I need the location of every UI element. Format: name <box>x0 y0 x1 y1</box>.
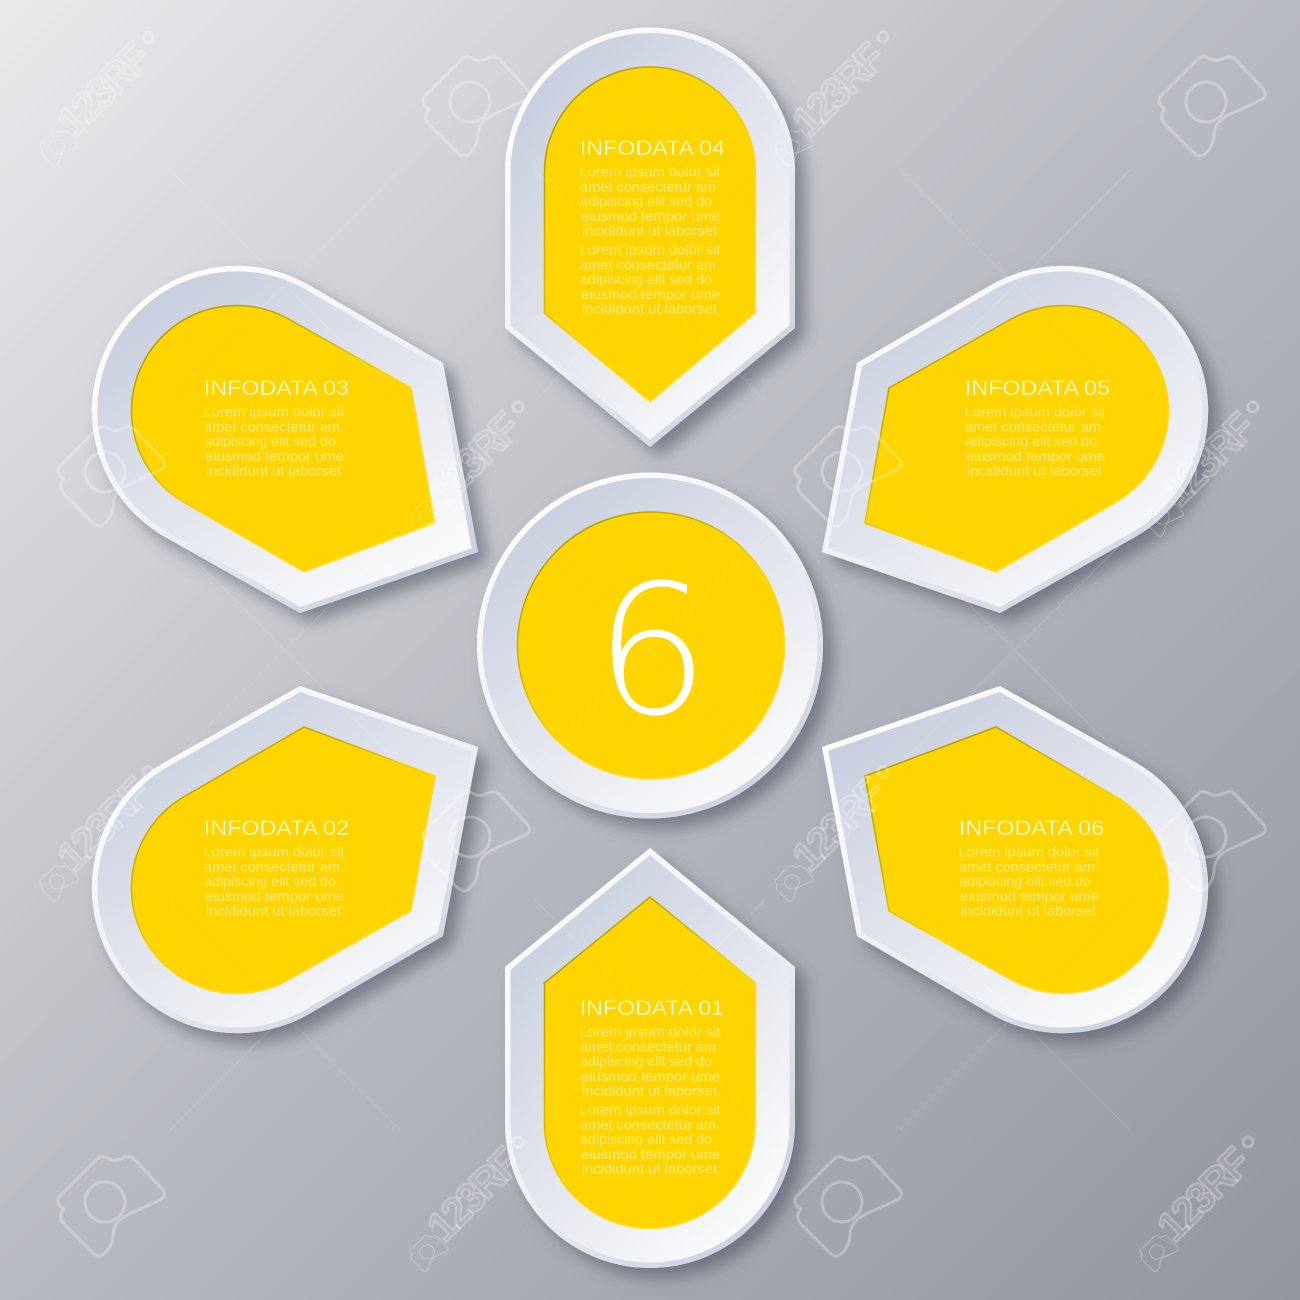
body text 04: amet consectetur am <box>580 256 716 272</box>
body text 05: Lorem ipsum dolor sit <box>964 404 1106 420</box>
body text 02: Lorem ipsum dolor sit <box>204 844 345 860</box>
heading 02: INFODATA 02 <box>204 817 349 840</box>
watermark camera row 4 left <box>58 1157 164 1256</box>
heading 01: INFODATA 01 <box>580 997 724 1020</box>
panel: infodata 05 <box>822 266 1208 613</box>
watermark camera row 2 centre-right <box>795 427 901 526</box>
body text 05: adipiscing elit sed do <box>965 433 1097 449</box>
body text 06: eiusmod tempor ume <box>960 888 1099 904</box>
card shape 05 <box>822 266 1208 613</box>
heading 04: INFODATA 04 <box>580 137 725 160</box>
body text 02: amet consectetur am <box>204 858 340 874</box>
body text 01: Lorem ipsum dolor sit <box>580 1024 721 1040</box>
body text 04 <box>580 164 721 317</box>
body text 03: amet consectetur am <box>204 418 340 434</box>
panel: infodata 06 <box>822 686 1208 1033</box>
watermark logo row 1 left: 123RF <box>48 33 160 145</box>
body text 01: eiusmod tempor ume <box>581 1146 720 1162</box>
watermark logo row 4 right: 123RF <box>1148 1138 1260 1250</box>
body text 05: eiusmod tempor ume <box>966 448 1105 464</box>
body text 06 <box>958 844 1100 919</box>
body text 04: amet consectetur am <box>580 178 716 194</box>
body text 02: adipiscing elit sed do <box>204 873 336 889</box>
body text 01: adipiscing elit sed do <box>580 1053 712 1069</box>
body text 03: adipiscing elit sed do <box>204 433 336 449</box>
card shape 01 <box>505 848 795 1268</box>
body text 03: Lorem ipsum dolor sit <box>204 404 345 420</box>
centre number: 6 <box>595 547 709 756</box>
heading 06: INFODATA 06 <box>959 817 1104 840</box>
watermark camera row 1 centre-left <box>423 57 529 156</box>
watermark logo row 3 centre-right: 123RF <box>783 768 895 880</box>
body text 01: amet consectetur am <box>580 1116 716 1132</box>
body text 06: incididunt ut laborset <box>961 903 1096 919</box>
watermark camera row 3 centre-left <box>423 792 529 891</box>
watermark camera row 2 left <box>58 427 164 526</box>
watermark logo row 2 right: 123RF <box>1153 403 1265 515</box>
body text 04: eiusmod tempor ume <box>581 286 720 302</box>
body text 04: adipiscing elit sed do <box>580 271 712 287</box>
body text 01: Lorem ipsum dolor sit <box>580 1102 721 1118</box>
body text 04: Lorem ipsum dolor sit <box>580 164 721 180</box>
body text 04: Lorem ipsum dolor sit <box>580 242 721 258</box>
panel: infodata 04 <box>505 28 795 447</box>
body text 01: adipiscing elit sed do <box>580 1131 712 1147</box>
body text 01: incididunt ut laborset <box>582 1161 717 1177</box>
watermark logo row 4 centre-left: 123RF <box>418 1138 530 1250</box>
watermark logo row 2 centre-left: 123RF <box>418 403 530 515</box>
watermark camera row 4 centre-right <box>795 1157 901 1256</box>
body text 04: incididunt ut laborset <box>582 223 717 239</box>
body text 03: eiusmod tempor ume <box>205 448 344 464</box>
body text 03: incididunt ut laborset <box>206 463 341 479</box>
watermark logo row 3 left: 123RF <box>48 768 160 880</box>
body text 02: eiusmod tempor ume <box>205 888 344 904</box>
panel: infodata 01 <box>505 848 795 1268</box>
watermark camera row 1 right <box>1159 57 1265 156</box>
body text 01: amet consectetur am <box>580 1038 716 1054</box>
heading 03: INFODATA 03 <box>204 377 349 400</box>
body text 01 <box>580 1024 721 1177</box>
body text 04: eiusmod tempor ume <box>581 208 720 224</box>
body text 04: incididunt ut laborset <box>582 301 717 317</box>
body text 03 <box>204 404 345 479</box>
body text 06: Lorem ipsum dolor sit <box>958 844 1100 860</box>
card shape 04 <box>505 28 795 447</box>
body text 06: adipiscing elit sed do <box>959 873 1091 889</box>
panel: infodata 03 <box>92 266 478 613</box>
body text 05: incididunt ut laborset <box>967 463 1102 479</box>
body text 04: adipiscing elit sed do <box>580 193 712 209</box>
heading 05: INFODATA 05 <box>965 377 1110 400</box>
body text 01: eiusmod tempor ume <box>581 1068 720 1084</box>
body text 02: incididunt ut laborset <box>206 903 341 919</box>
body text 01: incididunt ut laborset <box>582 1083 717 1099</box>
panel: centre circle <box>477 472 823 818</box>
card shape 06 <box>822 686 1208 1033</box>
body text 06: amet consectetur am <box>959 858 1095 874</box>
body text 02 <box>204 844 345 919</box>
card shape 03 <box>92 266 478 613</box>
card shape 02 <box>92 686 478 1033</box>
body text 05: amet consectetur am <box>965 418 1101 434</box>
panel: infodata 02 <box>92 686 478 1033</box>
watermark logo row 1 centre-right: 123RF <box>783 33 895 145</box>
centre ring <box>477 472 823 818</box>
watermark camera row 3 right <box>1159 792 1265 891</box>
body text 05 <box>964 404 1106 479</box>
